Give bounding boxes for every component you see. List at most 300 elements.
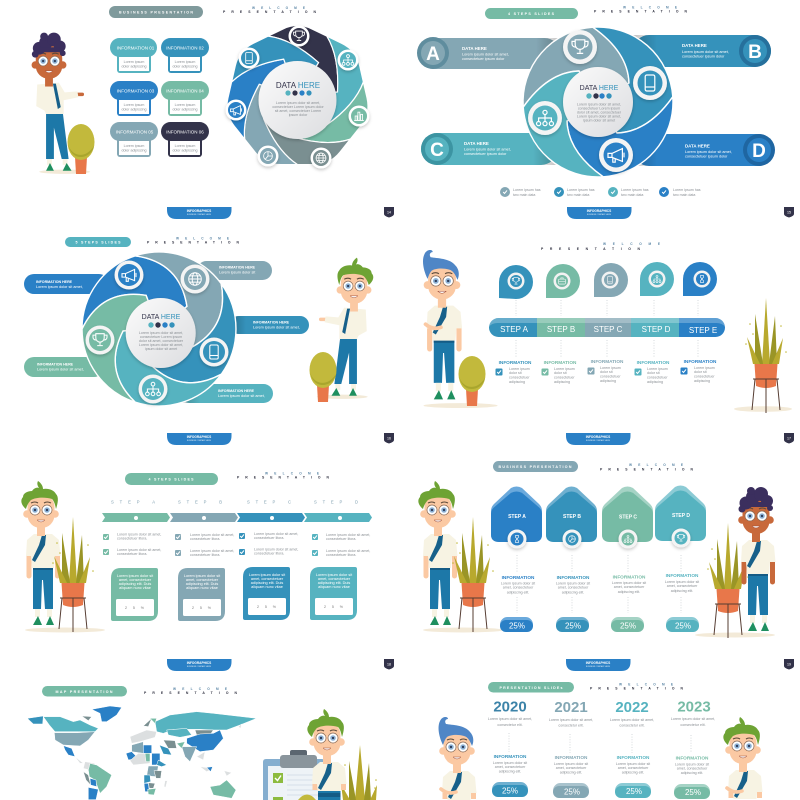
welcome heading: WELCOME — [176, 236, 229, 240]
step bar: STEP C — [594, 325, 623, 334]
step bar — [489, 318, 725, 337]
info text C: amet, consectetuer — [614, 585, 645, 589]
title pill: BUSINESS PRESENTATION — [498, 465, 572, 469]
info card 02: INFORMATION 02 — [166, 46, 204, 50]
footer tab — [567, 207, 632, 219]
percent pill B — [556, 617, 589, 632]
info text D — [665, 573, 699, 593]
character: curly hair man pointing — [32, 33, 90, 174]
percent card C: amet, consectetuer — [251, 577, 284, 581]
info column C: dolor sit — [600, 370, 613, 374]
house step B — [546, 486, 597, 548]
icon: phone — [238, 48, 260, 68]
info column D: INFORMATION — [637, 360, 670, 365]
info card 05: dolor adipiscing — [122, 148, 146, 152]
welcome heading: PRESENTATION — [147, 240, 240, 244]
wheel centre text disc: dolor sit amet, consectetuer — [139, 339, 184, 343]
check item 4: two main data — [673, 193, 695, 197]
check item 2: two main data — [567, 193, 589, 197]
page number badge: 15 — [787, 210, 791, 214]
percent card C — [243, 567, 290, 620]
icon: cactus — [310, 352, 336, 402]
welcome heading: PRESENTATION — [541, 247, 641, 251]
callout bar A: Lorem ipsum dolor sit amet, — [462, 52, 509, 56]
panel: slide 19 four house steps — [418, 461, 794, 671]
year column 2020: Lorem ipsum dolor sit amet, — [488, 717, 532, 721]
wheel centre text disc — [126, 298, 196, 368]
percent pill A — [500, 617, 533, 632]
checklist column A — [103, 532, 161, 556]
info card 06 — [161, 122, 209, 157]
title pill — [488, 682, 574, 692]
info column A: dolor sit — [509, 371, 522, 375]
percent card B — [178, 568, 225, 621]
year column 2022: Lorem ipsum dolor sit amet, — [610, 718, 654, 722]
callout bar A — [417, 37, 560, 69]
check item 2: Lorem ipsum has — [567, 188, 595, 192]
year column 2021: Lorem ipsum dolor sit amet, — [549, 718, 593, 722]
step labels: STEP B — [178, 500, 222, 504]
info card 01 — [110, 38, 157, 73]
character: potted plant leaves — [341, 745, 377, 800]
wheel centre text disc: ipsum dolor — [289, 113, 308, 117]
footer tab: BUSINESS COMPANY HERE — [187, 439, 212, 442]
footer tab: BUSINESS COMPANY HERE — [586, 439, 611, 442]
year column 2021: Lorem ipsum dolor sit — [554, 762, 588, 766]
year column 2022 — [610, 699, 654, 774]
checklist column C — [239, 532, 298, 556]
info bar bottom left: Lorem ipsum dolor sit amet, — [37, 368, 84, 372]
percent pill 2021 — [553, 783, 589, 798]
percent card D: aliquam nunc vitae — [318, 585, 350, 589]
character: green hair man — [307, 709, 346, 800]
welcome heading: WELCOME — [619, 682, 673, 686]
icon: pie — [258, 146, 278, 166]
percent card B: aliquam nunc vitae — [186, 586, 218, 590]
percent pill 2021: 25% — [564, 788, 580, 796]
info card 03: dolor adipiscing — [122, 108, 146, 112]
checklist column D — [312, 533, 370, 557]
footer tab: BUSINESS COMPANY HERE — [187, 213, 212, 216]
year column 2020: adipiscing elit. — [499, 770, 521, 774]
percent card C: aliquam nunc vitae — [251, 585, 283, 589]
checklist column A: Lorem ipsum dolor sit amet, — [117, 532, 161, 536]
checklist column B — [175, 533, 234, 557]
pin step C — [594, 263, 628, 297]
character: curly hair man — [738, 487, 776, 631]
character: green hair man pointing — [317, 258, 373, 399]
info column A: adipiscing — [509, 380, 525, 384]
year column 2023: INFORMATION — [676, 756, 709, 760]
wheel chart: seven blades — [219, 21, 379, 179]
welcome heading — [594, 6, 688, 14]
percent card D — [310, 567, 357, 620]
year column 2023: adipiscing elit. — [681, 771, 703, 775]
percent pill D: 25% — [675, 622, 691, 630]
info column D: dolor sit — [647, 371, 660, 375]
info card 01: dolor adipiscing — [122, 64, 146, 68]
icon: trophy — [288, 26, 310, 46]
info text A: INFORMATION — [502, 575, 535, 580]
info bar top left — [24, 274, 109, 294]
icon: cactus — [68, 124, 94, 174]
page number badge — [384, 659, 394, 670]
character: green hair man — [723, 717, 762, 799]
year column 2023: 2023 — [677, 698, 711, 716]
step labels: STEP A — [111, 500, 155, 504]
year column 2022: amet, consectetuer — [618, 766, 649, 770]
info column A: Lorem ipsum — [509, 367, 530, 371]
info text B: Lorem ipsum dolor sit — [556, 582, 590, 586]
callout bar C: Lorem ipsum dolor sit amet, — [464, 148, 511, 152]
wheel centre text disc: ipsum dolor sit amet — [583, 118, 615, 122]
checklist column D: consectetuer litora. — [326, 537, 356, 541]
footer tab — [566, 433, 630, 445]
callout bar D: DATA HERE — [685, 144, 710, 148]
pin step E — [683, 262, 717, 296]
page number badge — [784, 207, 794, 218]
panel: slide 17 five steps timeline — [423, 242, 794, 445]
year column 2021: amet, consectetuer — [556, 766, 587, 770]
info text C: Lorem ipsum dolor sit — [612, 581, 646, 585]
wheel centre text disc: Lorem ipsum dolor sit amet, — [139, 331, 183, 335]
icon: megaphone — [114, 260, 144, 290]
year column 2020: 2020 — [493, 698, 527, 716]
info column E: INFORMATION — [684, 359, 717, 364]
info card 03: INFORMATION 03 — [117, 88, 155, 94]
wheel centre text disc: sit amet, consectetuer Lorem — [275, 109, 321, 113]
icon: chart — [348, 106, 370, 126]
percent card A: amet, consectetuer — [119, 578, 152, 582]
welcome heading: WELCOME — [265, 472, 319, 476]
check item 3: two main data — [621, 193, 643, 197]
checklist column D: Lorem ipsum dolor sit amet, — [326, 533, 370, 537]
percent card C: adipiscing elit. Duis — [251, 581, 283, 585]
welcome heading: PRESENTATION — [594, 10, 688, 14]
info card 01: INFORMATION 01 — [117, 46, 155, 50]
welcome heading: WELCOME — [603, 242, 660, 246]
check item 3: Lorem ipsum has — [621, 188, 649, 192]
page number badge — [784, 659, 794, 670]
footer tab: INFOGRAPHICS — [587, 209, 611, 213]
info text C: INFORMATION — [613, 574, 646, 580]
info card 02: dolor adipiscing — [173, 64, 197, 68]
character: blue hair man — [423, 250, 498, 408]
welcome heading: PRESENTATION — [600, 468, 694, 472]
checklist column D: Lorem ipsum dolor sit amet, — [326, 549, 370, 553]
icon: globe — [180, 264, 210, 294]
percent pill 2023 — [674, 784, 710, 799]
year column 2022: INFORMATION — [617, 755, 650, 760]
year column 2021: INFORMATION — [555, 755, 588, 760]
percent card C: 25% — [257, 605, 277, 609]
title pill: 4 STEPS SLIDES — [148, 478, 194, 482]
wheel centre text disc: dolor sit amet, consectetuer — [577, 110, 622, 114]
step labels: STEP D — [314, 500, 358, 504]
wheel centre text disc — [258, 61, 336, 139]
info bar top left: INFORMATION HERE — [36, 280, 73, 284]
year column 2021: 2021 — [554, 699, 588, 716]
info card 06: dolor adipiscing — [173, 148, 197, 152]
info text A: amet, consectetuer — [503, 586, 534, 590]
wheel chart: four blades — [523, 27, 673, 177]
info bar bottom left — [24, 357, 104, 377]
callout bar A: A — [426, 44, 440, 65]
welcome heading: WELCOME — [629, 463, 683, 467]
welcome heading: PRESENTATION — [590, 686, 684, 690]
house step A: STEP A — [508, 514, 526, 520]
percent card B: Lorem ipsum dolor sit — [184, 574, 221, 578]
info column B: adipiscing — [554, 380, 570, 384]
year column 2023: consectetur elit. — [680, 723, 706, 727]
percent card A: adipiscing elit. Duis — [119, 582, 151, 586]
info bar bottom right: Lorem ipsum dolor sit amet, — [218, 394, 265, 398]
info bar top right: Lorem ipsum dolor sit — [219, 270, 256, 274]
info column A: INFORMATION — [499, 360, 532, 365]
year column 2020 — [488, 698, 532, 774]
percent card B: 25% — [192, 606, 212, 610]
welcome heading: WELCOME — [252, 6, 305, 10]
title pill: MAP PRESENTATION — [56, 690, 113, 694]
percent pill 2022 — [615, 783, 651, 798]
info bar top right: INFORMATION HERE — [219, 266, 256, 270]
checklist column A: consectetuer litora. — [117, 536, 147, 540]
callout bar D — [633, 134, 775, 166]
percent pill D — [666, 617, 699, 632]
character: blue hair man — [439, 717, 476, 800]
wheel chart: five blades — [66, 233, 264, 433]
info bar middle right: Lorem ipsum dolor sit amet, — [253, 326, 300, 330]
year column 2023: Lorem ipsum dolor sit amet, — [671, 717, 715, 721]
info column C — [588, 359, 624, 383]
info card 06: INFORMATION 06 — [166, 130, 204, 134]
footer tab — [167, 207, 232, 219]
pin step A — [499, 265, 533, 299]
wheel centre text disc — [563, 67, 633, 137]
step labels — [111, 500, 358, 504]
title pill: 4 STEPS SLIDES — [508, 12, 555, 16]
info text B: amet, consectetuer — [558, 586, 589, 590]
panel: map presentation slide — [27, 686, 377, 800]
info card 03: Lorem ipsum — [124, 103, 144, 107]
info text D: adipiscing elit. — [671, 589, 693, 593]
percent pill 2022: 25% — [626, 787, 642, 796]
footer tab: BUSINESS COMPANY HERE — [586, 665, 611, 668]
wheel centre text disc: consectetuer Lorem ipsum dolor — [272, 105, 324, 109]
step bar: STEP A — [500, 325, 529, 334]
percent card B: amet, consectetuer — [186, 578, 219, 582]
checklist column C: Lorem ipsum dolor sit amet, — [254, 548, 298, 552]
panel: timeline years slide — [439, 682, 762, 800]
info bar middle right — [230, 316, 309, 334]
checklist column D: consectetuer litora. — [326, 553, 356, 557]
checklist column C: consectetuer litora. — [254, 552, 284, 556]
character: potted plant right — [695, 523, 775, 638]
info card 02 — [161, 38, 209, 73]
panel: slide 16 five-part wheel — [24, 233, 394, 445]
info text A — [501, 575, 535, 594]
pin step B — [546, 264, 580, 298]
info column E: dolor sit — [694, 370, 707, 374]
info text A: Lorem ipsum dolor sit — [501, 582, 535, 586]
info column B — [542, 360, 577, 384]
check item 4: Lorem ipsum has — [673, 188, 701, 192]
callout bar B: consectetuer ipsum dolor — [682, 54, 725, 58]
info text C: adipiscing elit. — [618, 590, 640, 594]
info card 05: Lorem ipsum — [124, 144, 144, 148]
title pill — [125, 473, 218, 485]
info card 04 — [161, 81, 209, 116]
info text B — [556, 575, 590, 594]
welcome heading — [237, 472, 330, 480]
character: green hair man — [21, 481, 105, 632]
welcome heading: PRESENTATION — [223, 10, 317, 14]
title pill — [65, 237, 131, 247]
info column C: adipiscing — [600, 379, 616, 383]
info card 02: Lorem ipsum — [175, 60, 195, 64]
info text D: amet, consectetuer — [667, 584, 698, 588]
callout bar C — [421, 133, 557, 165]
year column 2020: consectetur elit. — [497, 723, 523, 727]
welcome heading: PRESENTATION — [237, 476, 330, 480]
info card 05: INFORMATION 05 — [116, 130, 154, 134]
percent card D: adipiscing elit. Duis — [318, 581, 350, 585]
icon: cactus top — [298, 794, 316, 800]
footer tab: BUSINESS COMPANY HERE — [587, 213, 612, 216]
info card 04: INFORMATION 04 — [166, 88, 204, 94]
info card 04: Lorem ipsum — [175, 103, 195, 107]
percent pill 2020 — [492, 782, 528, 797]
checklist column B: Lorem ipsum dolor sit amet, — [190, 549, 234, 553]
info bar bottom right — [180, 384, 273, 403]
info column B: Lorem ipsum — [554, 367, 575, 371]
footer tab: INFOGRAPHICS — [187, 209, 211, 213]
info column C: consectetuer — [600, 374, 621, 378]
percent card A: aliquam nunc vitae — [119, 586, 151, 590]
callout bar B — [633, 35, 771, 67]
percent pill 2020: 25% — [502, 786, 518, 796]
callout bar B: Lorem ipsum dolor sit amet, — [682, 50, 729, 54]
clipboard illustration — [263, 750, 325, 800]
check item 3 — [608, 187, 649, 197]
footer tab: BUSINESS COMPANY HERE — [187, 665, 212, 668]
title pill: 5 STEPS SLIDES — [76, 240, 121, 244]
welcome heading — [147, 236, 240, 244]
icon: hierarchy — [528, 101, 562, 135]
icon: phone — [633, 66, 667, 100]
percent card D: 25% — [324, 605, 344, 609]
wheel centre text disc: DATA HERE — [580, 85, 619, 92]
percent card A: 25% — [125, 606, 145, 610]
chevron arrow row — [102, 513, 372, 522]
house step A — [491, 486, 542, 548]
info card 06: Lorem ipsum — [175, 144, 195, 148]
percent card C: Lorem ipsum dolor sit — [249, 573, 286, 577]
callout bar B: B — [748, 42, 762, 63]
step labels: STEP C — [247, 500, 291, 504]
icon: trophy — [86, 326, 114, 354]
info column A — [496, 360, 532, 384]
welcome heading: WELCOME — [623, 6, 677, 10]
check item 1 — [500, 187, 541, 197]
percent card A — [111, 568, 158, 621]
step bar: STEP E — [689, 326, 717, 335]
percent pill B: 25% — [565, 622, 581, 630]
character: potted plant left — [452, 517, 494, 632]
info column C: INFORMATION — [591, 359, 624, 364]
world map — [27, 706, 257, 800]
info text B: INFORMATION — [557, 575, 590, 580]
panel: slide 18 four steps arrows — [21, 472, 394, 671]
panel: slide 15 four-part wheel — [417, 6, 794, 219]
wheel centre text disc: Lorem ipsum dolor sit amet, — [139, 343, 183, 347]
icon: megaphone — [226, 100, 246, 120]
character: green hair man — [418, 481, 503, 632]
title pill — [109, 6, 203, 18]
pin step D — [640, 262, 674, 296]
info column B: INFORMATION — [544, 360, 577, 365]
icon: cactus — [458, 356, 486, 406]
info bar top left: Lorem ipsum dolor sit amet, — [36, 285, 83, 289]
year column 2021 — [549, 699, 593, 774]
info column D — [634, 360, 670, 384]
callout bar D: consectetuer ipsum dolor — [685, 154, 728, 158]
info column B: dolor sit — [554, 371, 567, 375]
year column 2023: Lorem ipsum dolor sit — [675, 762, 709, 766]
page number badge — [384, 433, 394, 444]
character: potted plant — [734, 298, 792, 413]
welcome heading — [144, 687, 238, 695]
step bar: STEP D — [642, 325, 671, 334]
info column E: Lorem ipsum — [694, 366, 715, 370]
footer tab: INFOGRAPHICS — [187, 435, 211, 439]
year column 2022: Lorem ipsum dolor sit — [616, 762, 650, 766]
icon: globe — [310, 148, 332, 168]
page number badge: 16 — [387, 436, 391, 440]
wheel centre text disc: Lorem ipsum dolor sit amet, — [276, 101, 320, 105]
icon: trophy — [563, 30, 597, 64]
wheel centre text disc: ipsum dolor sit amet — [145, 347, 177, 351]
wheel centre text disc: consectetuer Lorem ipsum — [578, 106, 620, 110]
house step D: STEP D — [672, 513, 690, 519]
welcome heading: PRESENTATION — [144, 691, 238, 695]
info bar bottom right: INFORMATION HERE — [218, 389, 255, 393]
info column D: consectetuer — [647, 376, 668, 380]
year column 2022: adipiscing elit. — [622, 770, 644, 774]
percent card D: amet, consectetuer — [318, 577, 351, 581]
callout bar D: D — [752, 141, 766, 162]
percent pill C: 25% — [620, 622, 636, 630]
title pill — [42, 686, 127, 696]
percent card D: Lorem ipsum dolor sit — [316, 573, 353, 577]
checklist column B: Lorem ipsum dolor sit amet, — [190, 533, 234, 537]
footer tab: INFOGRAPHICS — [586, 435, 610, 439]
footer tab — [167, 433, 232, 445]
year column 2023 — [671, 698, 715, 775]
callout bar D: Lorem ipsum dolor sit amet, — [685, 150, 732, 154]
percent card A: Lorem ipsum dolor sit — [117, 574, 154, 578]
page number badge: 18 — [387, 662, 391, 666]
footer tab — [566, 659, 630, 671]
wheel centre text disc: DATA HERE — [142, 314, 181, 321]
check item 2 — [554, 187, 595, 197]
year column 2022: consectetur elit. — [619, 724, 645, 728]
info text D: INFORMATION — [666, 573, 699, 578]
checklist column A: consectetuer litora. — [117, 552, 147, 556]
wheel centre text disc: Lorem ipsum dolor sit amet, — [577, 102, 621, 106]
footer tab: INFOGRAPHICS — [586, 661, 610, 665]
house step C — [602, 486, 653, 548]
